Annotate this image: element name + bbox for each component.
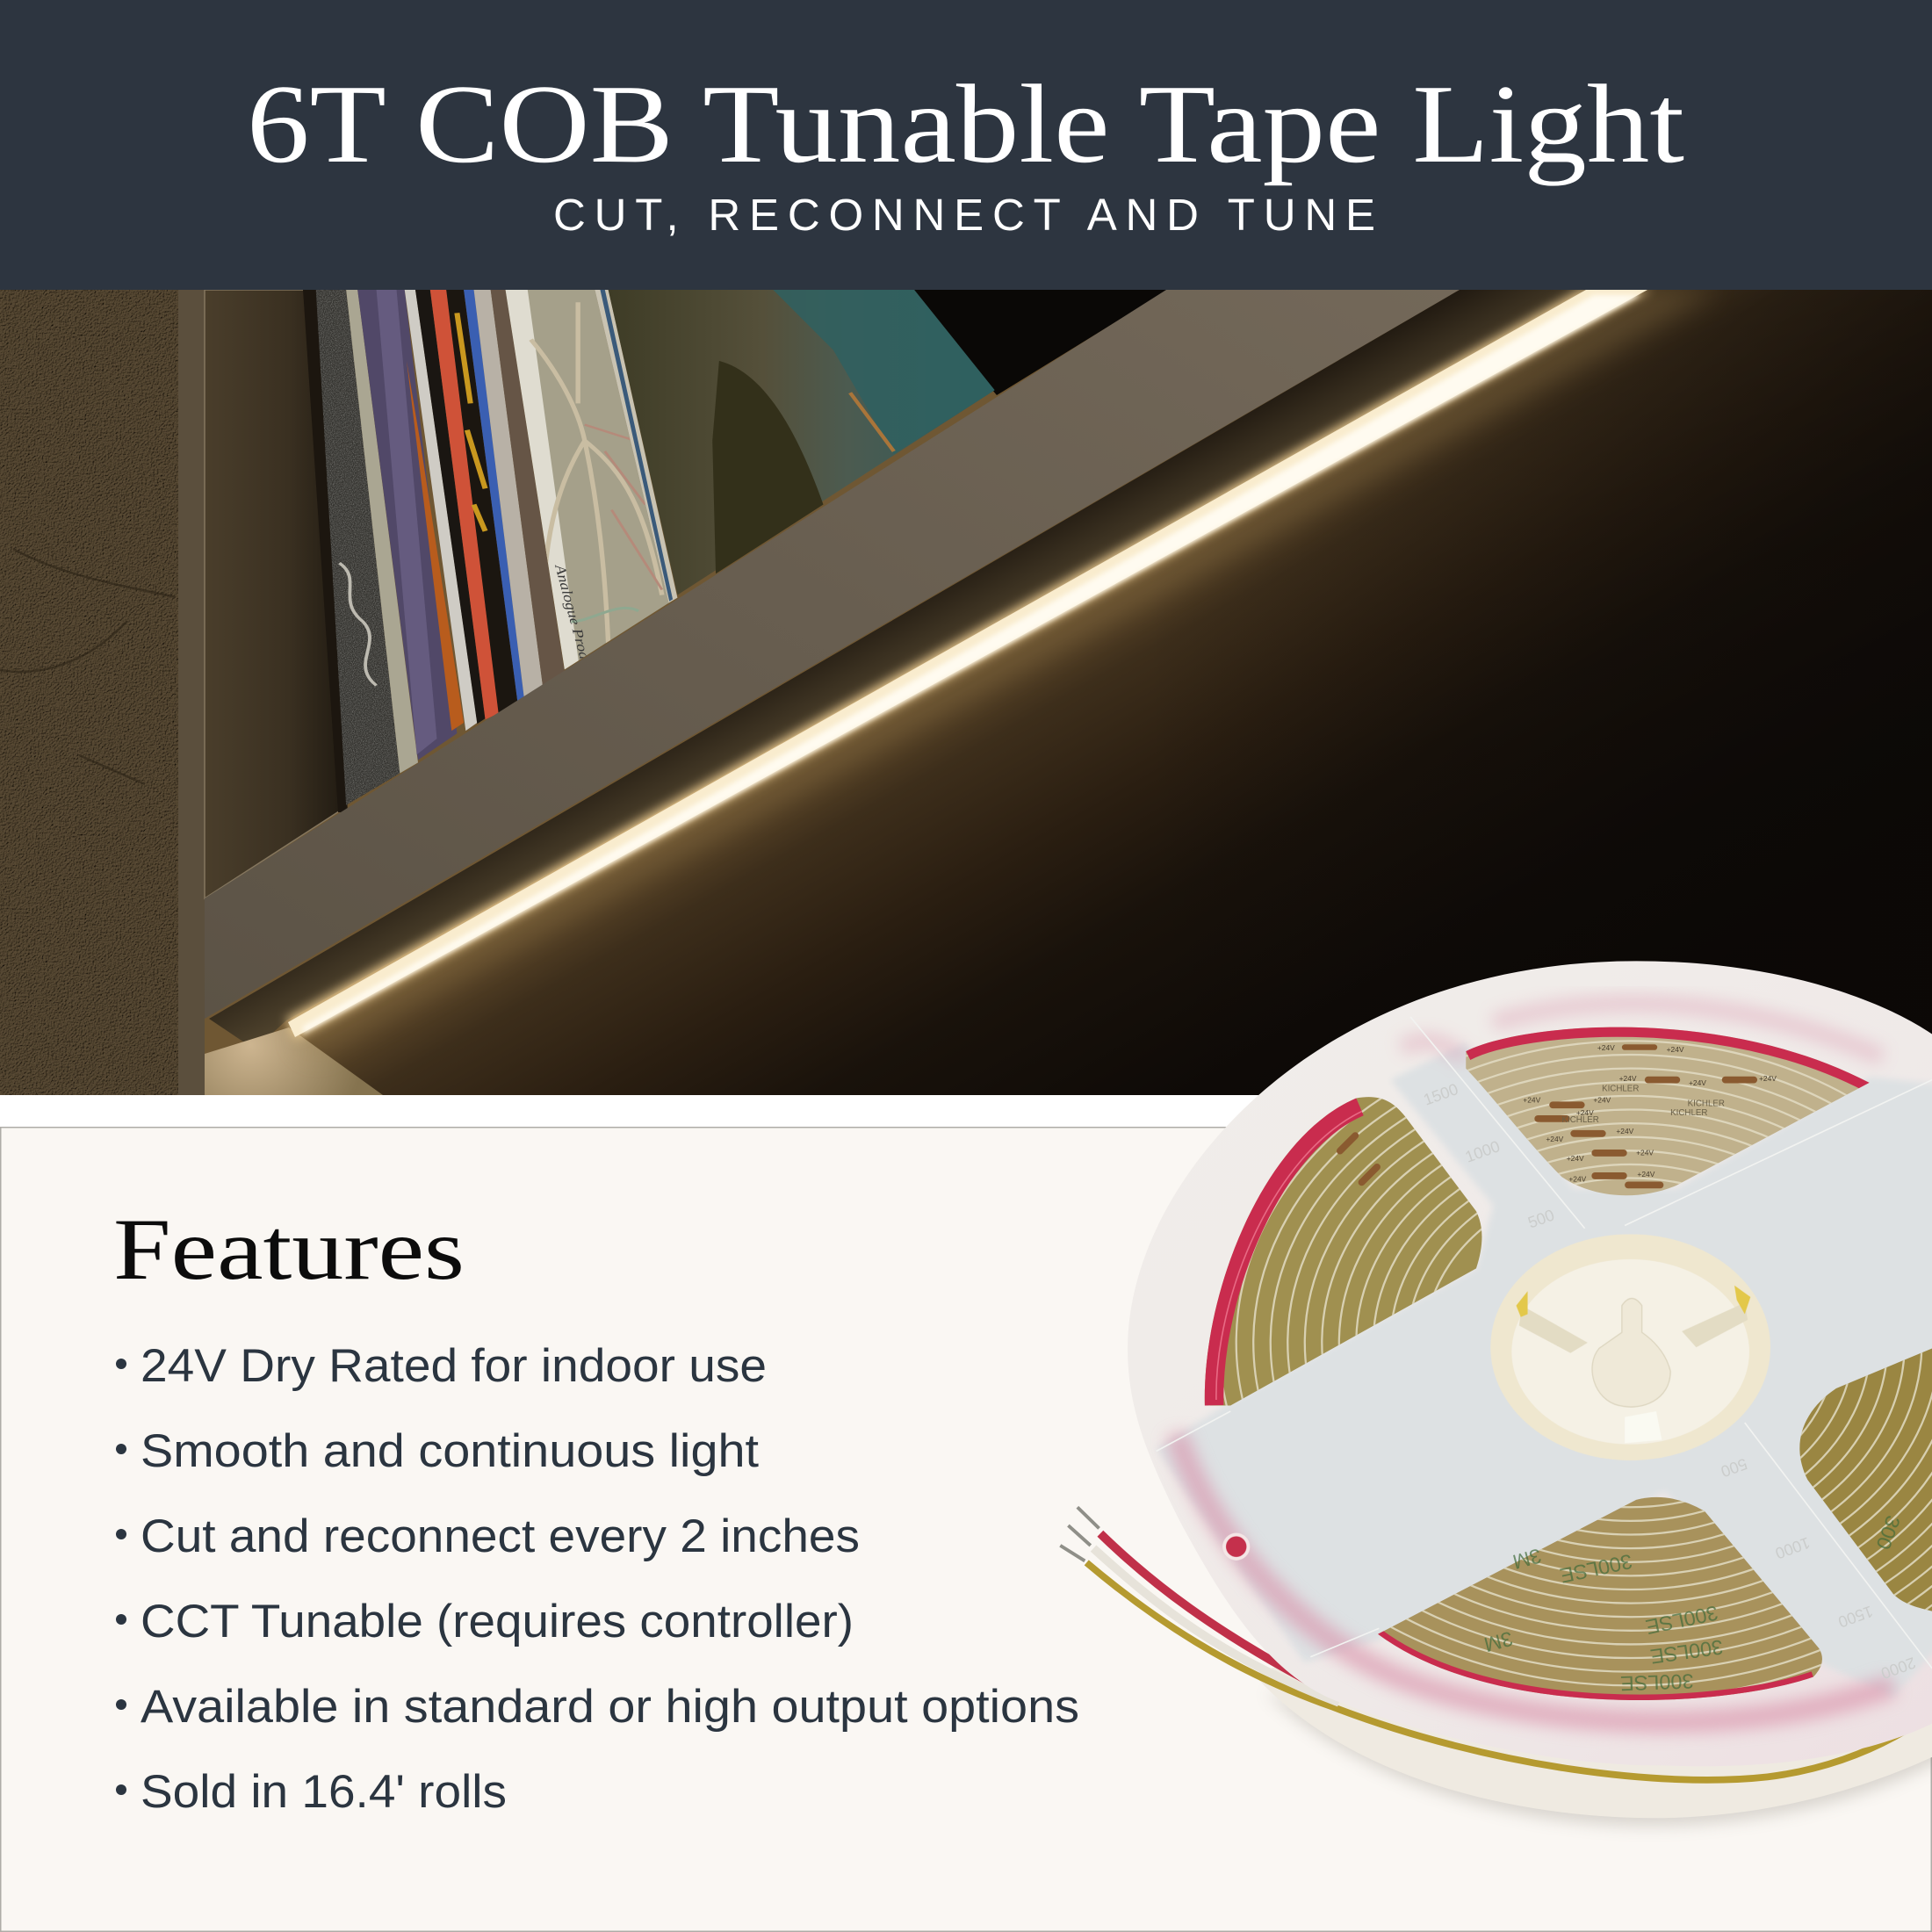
length markings: 2000	[1878, 1654, 1918, 1683]
right-side falloff	[1290, 290, 1932, 566]
tape printing: +24V	[1567, 1154, 1584, 1163]
light glow	[292, 290, 1721, 1058]
red wire at far edge	[1779, 1703, 1932, 1760]
adhesive liner printing: 300LSE	[1649, 1635, 1725, 1669]
red wire coils	[1205, 1027, 1870, 1700]
reel soft shadow	[1265, 1691, 1932, 1826]
adhesive liner printing: 300LSE	[1620, 1669, 1694, 1695]
length markings	[1421, 1080, 1918, 1683]
bottom window	[1378, 1497, 1822, 1700]
tape printing: +24V	[1523, 1096, 1541, 1105]
length markings: 500	[1719, 1455, 1749, 1481]
tape printing: +24V	[1568, 1174, 1587, 1183]
white wire	[1093, 1548, 1339, 1703]
yellow clips	[1517, 1291, 1528, 1317]
central hub	[1490, 1234, 1770, 1460]
underside channel of the shelf	[209, 290, 1590, 1049]
tape printing: +24V	[1667, 1045, 1684, 1054]
tape printing: +24V	[1619, 1074, 1637, 1083]
product: tape light reel	[1060, 961, 1932, 1826]
adhesive liner printing: 3M	[1481, 1627, 1515, 1656]
tape printing: +24V	[1759, 1074, 1777, 1083]
feature list	[116, 1340, 1079, 1818]
tape windows	[1185, 986, 1932, 1700]
tape printing: +24V	[1689, 1078, 1706, 1087]
item: cut and reconnect: Cut and reconnect every 2 inches	[141, 1510, 860, 1562]
tape printing: +24V	[1636, 1149, 1654, 1157]
adhesive liner printing: 300	[1871, 1512, 1905, 1553]
wire tips	[1060, 1507, 1099, 1561]
hub slots	[1519, 1306, 1588, 1353]
item: rolls: Sold in 16.4' rolls	[141, 1766, 507, 1818]
tape printing: KICHLER	[1562, 1115, 1599, 1125]
adhesive liner printing: 300LSE	[1644, 1601, 1720, 1639]
item: 24V: 24V Dry Rated for indoor use	[141, 1340, 767, 1392]
angled shelf beam	[205, 290, 1460, 1019]
tape printing: +24V	[1616, 1127, 1634, 1135]
sleeve spine text: Analogue Productions	[551, 563, 606, 706]
upper flange	[1128, 961, 1932, 1766]
length markings: 1000	[1463, 1137, 1503, 1166]
tape printing: KICHLER	[1670, 1108, 1707, 1118]
spoke seams	[1157, 1017, 1932, 1669]
length markings: 1500	[1421, 1080, 1460, 1109]
right window	[1799, 1348, 1932, 1611]
tape coils	[1185, 986, 1932, 1699]
left window	[1205, 1097, 1481, 1405]
item: output options: Available in standard or high output options	[141, 1681, 1079, 1733]
tape printing: KICHLER	[1602, 1085, 1639, 1094]
pink wire tint lower	[1176, 1434, 1893, 1722]
patterned record sleeve	[506, 290, 662, 706]
yellow wire	[1086, 1562, 1932, 1780]
dark wall under the shelf	[178, 290, 1932, 1095]
features heading: Features	[113, 1200, 465, 1298]
lower flange	[1253, 1634, 1932, 1818]
tape printing: +24V	[1637, 1170, 1655, 1179]
header band	[0, 0, 1932, 290]
row of records	[316, 290, 995, 805]
translucent spokes	[1157, 1042, 1932, 1697]
textured plaster wall	[0, 290, 178, 1095]
length markings: 1500	[1835, 1602, 1875, 1631]
length markings: 1000	[1773, 1533, 1813, 1562]
length markings: 500	[1525, 1206, 1557, 1232]
recessed side panel	[205, 290, 344, 898]
lead wires	[1060, 1507, 1932, 1780]
item: CCT tunable: CCT Tunable (requires controller)	[141, 1596, 854, 1647]
features panel	[1, 1128, 1931, 1931]
tape printing: +24V	[1597, 1043, 1615, 1052]
red wire	[1100, 1533, 1322, 1689]
item: smooth light: Smooth and continuous light	[141, 1425, 759, 1477]
spindle	[1592, 1298, 1670, 1407]
adhesive liner printing: 300LSE	[1558, 1550, 1634, 1587]
tape printing: +24V	[1576, 1108, 1594, 1117]
tape printing: KICHLER	[1688, 1099, 1725, 1109]
pink wire tint upper	[1402, 1004, 1882, 1060]
LED strip	[286, 290, 1651, 1040]
photo: lit bookshelf with tape light	[0, 290, 1932, 1095]
lit patch below the channel	[205, 1027, 383, 1095]
mounting hole	[1222, 1533, 1250, 1561]
tape printing: +24V	[1593, 1096, 1611, 1105]
tape printing	[1335, 1043, 1777, 1188]
top window	[1466, 1027, 1870, 1195]
title: 6T COB Tunable Tape Light	[247, 61, 1684, 186]
adhesive liner printing: 3M	[1510, 1544, 1544, 1574]
subtitle: CUT, RECONNECT AND TUNE	[553, 190, 1375, 240]
adhesive liner printing	[1481, 1512, 1905, 1695]
shelf upright	[178, 290, 205, 1095]
tape printing: +24V	[1546, 1135, 1564, 1143]
shadow behind books	[303, 290, 348, 812]
black void above books	[909, 290, 1168, 395]
